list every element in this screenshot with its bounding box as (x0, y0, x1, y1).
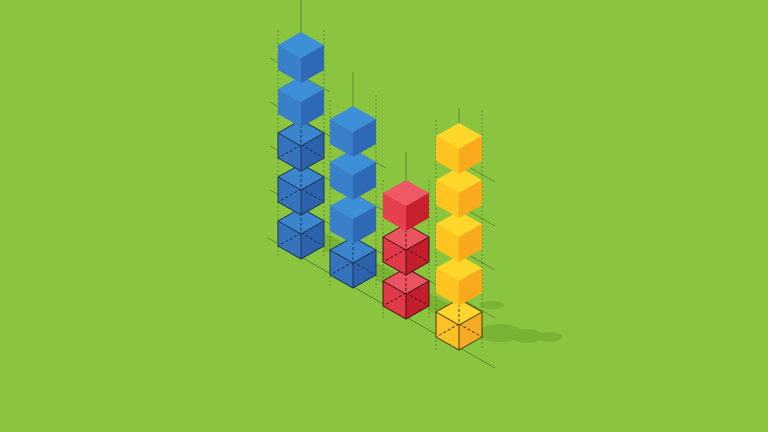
column 2: blue, 4 cubes (330, 106, 376, 288)
column 4: yellow, 5 cubes (436, 123, 482, 350)
column 3: red, 3 cubes (383, 180, 429, 319)
grid lines (268, 0, 495, 368)
shadows (324, 232, 562, 343)
column 1: blue, 5 cubes (278, 32, 324, 259)
